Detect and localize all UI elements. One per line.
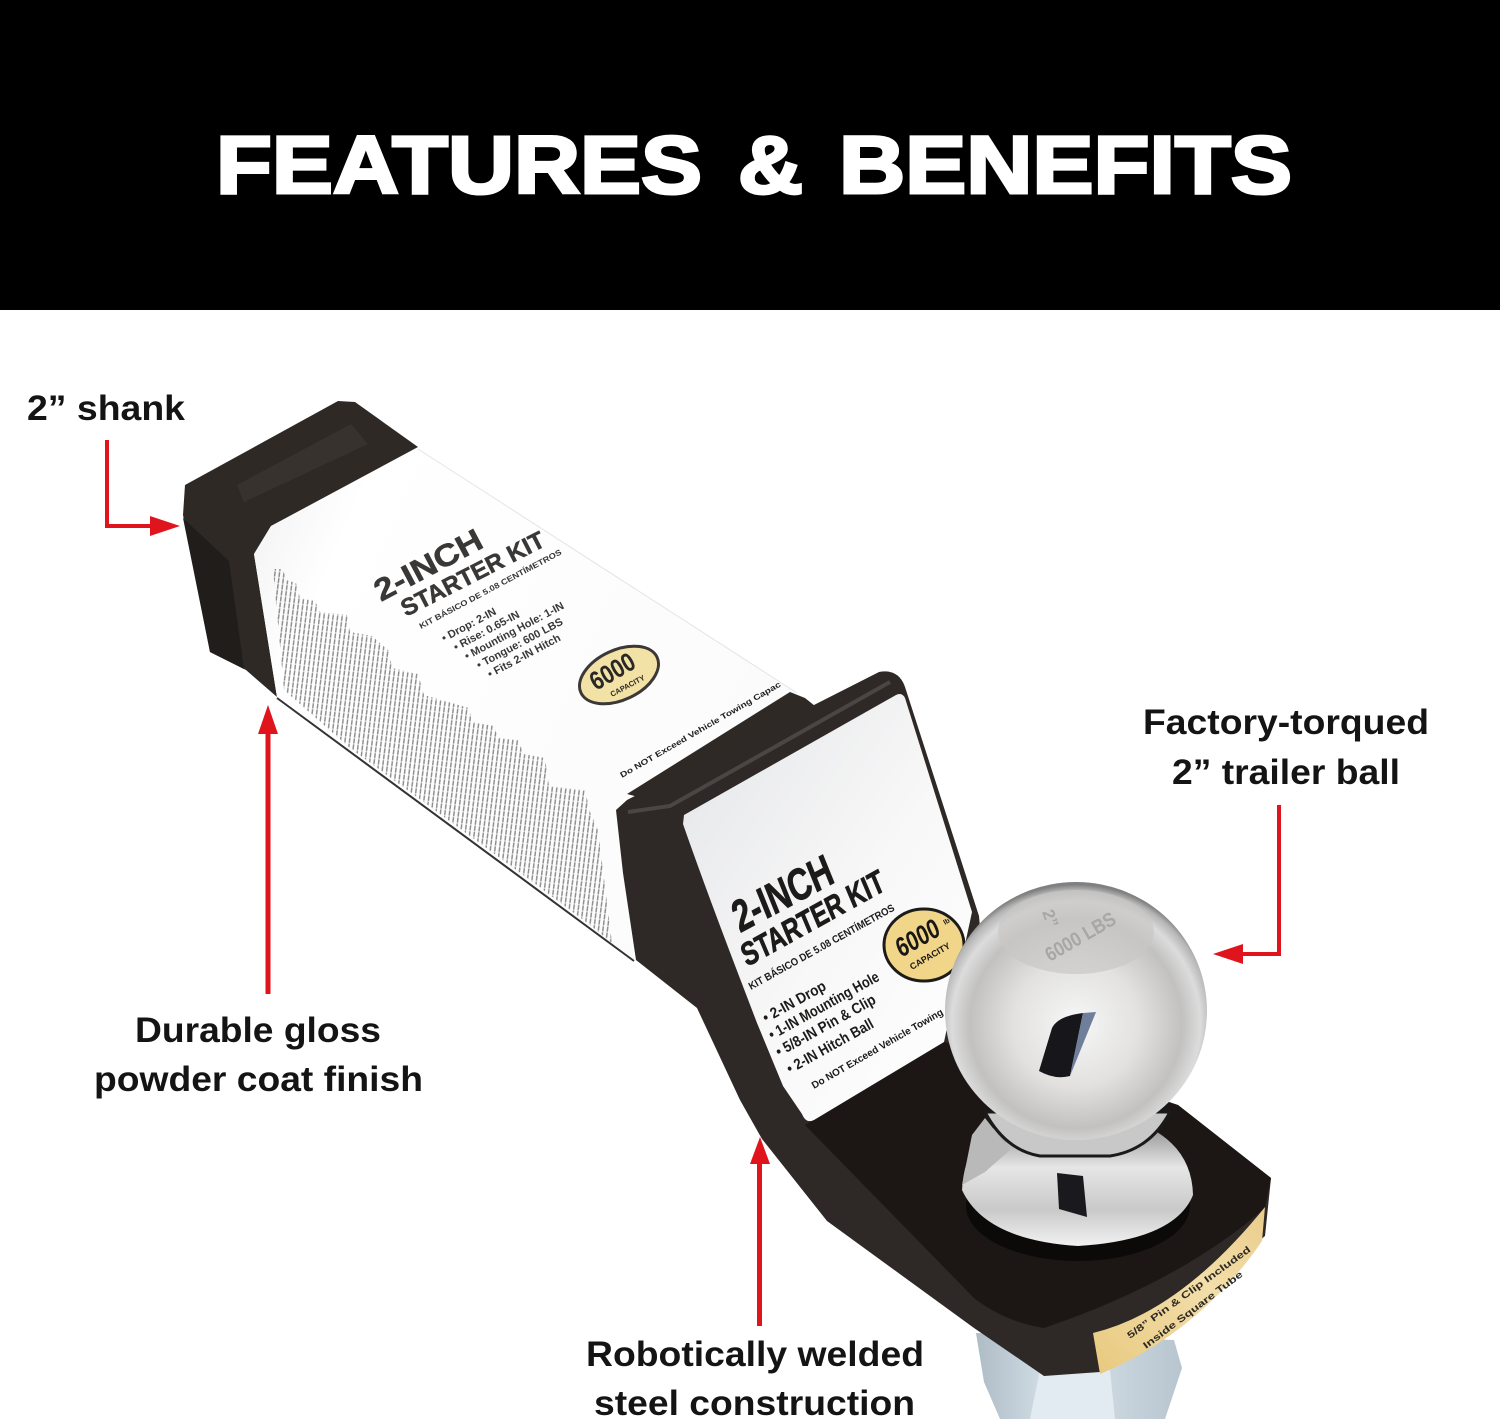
title (216, 120, 1292, 211)
mount white plate (683, 694, 972, 1121)
callout: welded steel (586, 1137, 924, 1419)
callout: welded steel: Robotically welded (586, 1335, 924, 1374)
plate heading: 2-INCH (725, 846, 840, 942)
arrow: finish (258, 705, 278, 994)
title: BENEFITS (839, 120, 1292, 211)
label heading: 2-INCH (368, 522, 488, 608)
plate capacity badge (884, 909, 964, 981)
front yellow tag: 5/8” Pin & Clip Included (1125, 1244, 1253, 1341)
title: FEATURES (216, 120, 702, 211)
warning line: Do NOT Exceed Vehicle Towing Capac (618, 680, 783, 780)
plate capacity badge: 6000 (891, 912, 944, 963)
chrome collar (962, 1118, 1193, 1261)
callout: powder coat finish (94, 705, 423, 1099)
product photo: ball mount (183, 401, 1271, 1419)
label spec list: • Mounting Hole: 1-IN (463, 600, 566, 663)
label spec list: • Rise: 0.65-IN (452, 609, 522, 654)
capacity badge (570, 635, 668, 715)
lower hitch nut (976, 1333, 1182, 1419)
plate capacity badge: lb (942, 918, 951, 927)
callout: powder coat finish: Durable gloss (135, 1011, 381, 1050)
label spec list: • Drop: 2-IN (440, 606, 498, 645)
plate warning line: Do NOT Exceed Vehicle Towing (810, 1007, 945, 1092)
fine print block (273, 569, 612, 943)
callout: trailer ball: Factory-torqued (1143, 703, 1429, 742)
label spec list (440, 600, 566, 681)
plate heading: STARTER KIT (736, 863, 890, 973)
shank white label (254, 449, 815, 961)
plate spec list (760, 969, 882, 1077)
plate spec list: • 2-IN Drop (760, 978, 829, 1026)
plate spec list: • 1-IN Mounting Hole (766, 969, 882, 1043)
shank end cap (183, 401, 418, 697)
callout: 2 inch shank (27, 389, 186, 536)
chrome trailer ball: 6000 LBS (1042, 908, 1120, 966)
callout: trailer ball: 2” trailer ball (1172, 753, 1400, 792)
capacity badge: CAPACITY (609, 673, 646, 699)
plate subheading: KIT BÁSICO DE 5.08 CENTÍMETROS (746, 901, 897, 993)
plate spec list: • 5/8-IN Pin & Clip (773, 991, 879, 1060)
label spec list: • Tongue: 600 LBS (475, 616, 565, 672)
arrow: shank (107, 440, 180, 536)
arrow: welded (750, 1137, 770, 1326)
capacity badge: 6000 (584, 646, 641, 696)
front yellow tag: Inside Square Tube (1141, 1269, 1245, 1351)
title: & (738, 120, 803, 211)
label subheading: KIT BÁSICO DE 5.08 CENTÍMETROS (418, 547, 564, 631)
chrome neck (985, 1112, 1170, 1156)
arrow: ball (1213, 805, 1279, 964)
chrome trailer ball (945, 882, 1207, 1140)
front yellow tag (1093, 1207, 1265, 1374)
callout: powder coat finish: powder coat finish (94, 1060, 423, 1099)
label spec list: • Fits 2-IN Hitch (486, 632, 563, 681)
callout: 2 inch shank: 2” shank (27, 389, 186, 428)
plate capacity badge: CAPACITY (908, 941, 952, 972)
mount body (616, 671, 1271, 1376)
label heading: STARTER KIT (396, 526, 550, 622)
ball emboss text: 2” (1038, 907, 1062, 930)
plate spec list: • 2-IN Hitch Ball (784, 1016, 877, 1077)
header band (0, 0, 1500, 310)
callout: trailer ball (1143, 703, 1429, 964)
